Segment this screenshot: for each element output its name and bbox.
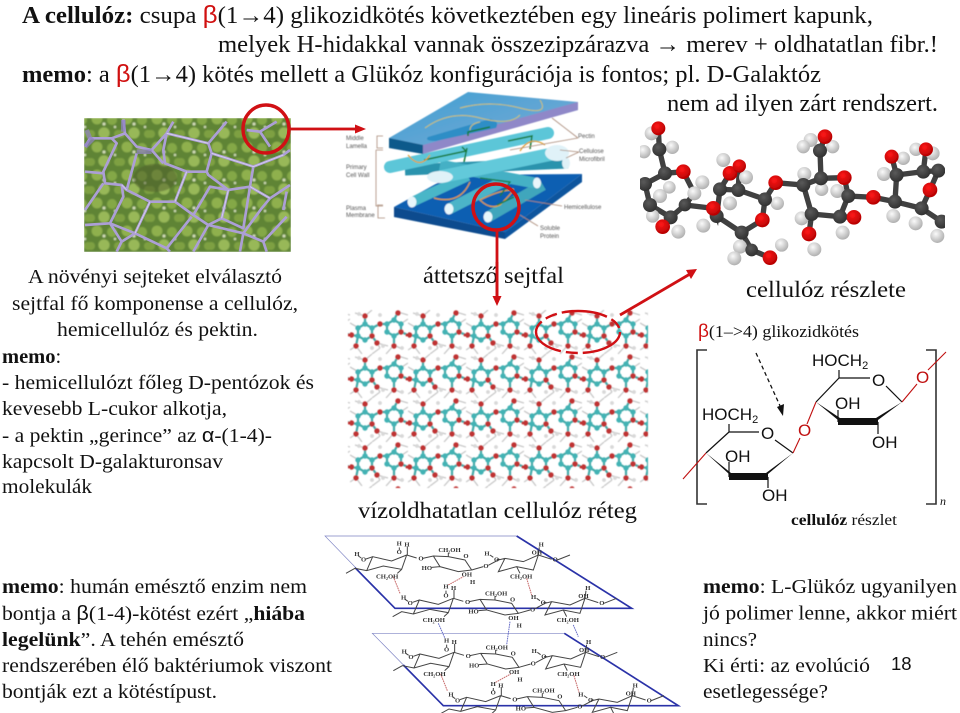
chain 4 bbox=[440, 681, 664, 713]
text: human digestion memo: legelünk”. A tehén emésztő bbox=[2, 629, 244, 651]
text: L-glucose memo: jó polimer lenne, akkor miért bbox=[702, 602, 957, 624]
labels: Hemicellulose bbox=[564, 205, 602, 211]
chain 2: O bbox=[530, 606, 535, 613]
labels: Pectin bbox=[578, 134, 595, 140]
chain 1: O bbox=[553, 557, 558, 564]
chain 2: OH bbox=[578, 593, 589, 600]
chain 3: HO bbox=[469, 662, 479, 669]
text: human digestion memo: bontja a β(1-4)-kötést ezért „ hiába bbox=[2, 602, 305, 625]
chain 1: O bbox=[483, 563, 489, 570]
chain 3: CH₂OH bbox=[486, 644, 509, 651]
chain 2: H bbox=[531, 594, 537, 601]
labels bbox=[346, 134, 605, 240]
arrow: lattice to structural formula bbox=[620, 269, 697, 315]
chain 3: O bbox=[444, 646, 449, 653]
ring 2: 2 bbox=[862, 360, 868, 372]
chain 1: O bbox=[463, 553, 469, 560]
chain 3: H bbox=[452, 639, 458, 646]
chain 1: H bbox=[539, 542, 545, 549]
chain 2: HO bbox=[468, 608, 479, 615]
brackets and leader lines bbox=[376, 118, 579, 226]
arrow: micrograph to cell wall diagram bbox=[289, 124, 366, 134]
labels: Plasma bbox=[346, 206, 367, 212]
chain 2: H bbox=[585, 585, 591, 592]
chain 1: HO bbox=[422, 565, 432, 572]
chain 1: OH bbox=[532, 550, 543, 557]
chain 1: O bbox=[494, 556, 499, 563]
text: plant cell wall notes: hemicellulóz és pektin. bbox=[57, 319, 258, 341]
micrograph: plant cells bbox=[84, 118, 291, 252]
chain 2: OH bbox=[508, 615, 519, 622]
labels: Primary bbox=[346, 165, 367, 171]
chain 1: CH₂OH bbox=[510, 574, 533, 581]
text: plant cell wall notes: memo: bbox=[2, 346, 61, 368]
title: cellulóz summary bbox=[22, 1, 938, 117]
text: human digestion memo: rendszerében élő baktériumok viszont bbox=[2, 655, 332, 677]
chain 4: O bbox=[491, 690, 496, 697]
ring 1: HOCH bbox=[702, 405, 752, 424]
title: cellulóz summary: memo: a β(1→4) kötés mellett a Glükóz konfigurációja is fontos; pl. D-Galaktóz bbox=[22, 60, 821, 88]
chain 2: CH₂OH bbox=[557, 617, 580, 624]
ring 1: O bbox=[761, 424, 774, 443]
chain 1: H bbox=[484, 551, 490, 558]
chain 2: O bbox=[443, 592, 449, 599]
ring 1: OH bbox=[762, 486, 788, 505]
arrow: dashed pointer to bond bbox=[756, 353, 784, 416]
chain 4: H bbox=[498, 682, 504, 689]
text: plant cell wall notes: sejtfal fő komponense a cellulóz, bbox=[12, 293, 298, 315]
text: human digestion memo: memo: humán emésztő enzim nem bbox=[2, 576, 307, 598]
chain 1 bbox=[346, 540, 570, 586]
chain 4: H bbox=[633, 682, 639, 689]
ring 2 bbox=[812, 351, 902, 452]
text: L-glucose memo: Ki érti: az evolúció bbox=[703, 655, 870, 677]
chain 3: O bbox=[511, 650, 516, 657]
chain 1: O bbox=[397, 549, 402, 556]
text: L-glucose memo bbox=[702, 576, 957, 703]
ring 1: 2 bbox=[752, 414, 758, 426]
chain 3: CH₂OH bbox=[557, 671, 580, 678]
chain 3: OH bbox=[579, 647, 590, 654]
labels: Cell Wall bbox=[346, 173, 369, 179]
chain 1: H bbox=[470, 579, 476, 586]
chain 1: H bbox=[397, 540, 403, 547]
ring 2: OH bbox=[872, 433, 898, 452]
red arrow over heading bbox=[496, 262, 498, 298]
ring 1: OH bbox=[725, 447, 750, 466]
upper sheet bbox=[325, 536, 632, 608]
text: plant cell wall notes: - hemicellulózt főleg D-pentózok és bbox=[2, 372, 314, 394]
text: L-glucose memo: memo: L-Glükóz ugyanilyen bbox=[703, 576, 957, 598]
upper middle lamella slab bbox=[389, 92, 578, 154]
labels: Protein bbox=[540, 234, 559, 240]
title: cellulóz summary: nem ad ilyen zárt rendszert. bbox=[667, 91, 938, 117]
chain 2: O bbox=[510, 596, 515, 603]
chain 4: H bbox=[448, 692, 454, 699]
labels: Soluble bbox=[540, 226, 561, 232]
labels: Membrane bbox=[346, 213, 375, 219]
chain 3: H bbox=[444, 638, 450, 645]
text: plant cell wall notes: kapcsolt D-galakturonsav bbox=[2, 451, 224, 473]
chain 1: O bbox=[418, 556, 424, 563]
callout: dashed ellipse on lattice bbox=[536, 311, 620, 353]
ring 1 bbox=[702, 405, 793, 505]
chain 1: H bbox=[404, 542, 410, 549]
text: plant cell wall notes: kevesebb L-cukor alkotja, bbox=[2, 398, 227, 420]
chain 4: O bbox=[577, 704, 582, 711]
middle cellulose microfibrils bbox=[390, 133, 570, 207]
lower sheet bbox=[372, 633, 678, 706]
text: L-glucose memo: nincs? bbox=[703, 629, 757, 651]
chain 3: O bbox=[408, 654, 414, 661]
chain 2 bbox=[393, 584, 617, 629]
chain 3: H bbox=[586, 639, 592, 646]
chart: structural formula of cellulose bbox=[683, 321, 946, 529]
chain 1: O bbox=[361, 557, 366, 564]
chain 3: H bbox=[402, 648, 408, 655]
arrow: cell wall down to cellulose layer bbox=[492, 230, 502, 306]
chain 2: O bbox=[408, 600, 413, 607]
caption: cellulose detail: cellulóz részlet bbox=[791, 512, 898, 529]
chain 2: CH₂OH bbox=[485, 590, 508, 597]
chain 2: O bbox=[465, 599, 470, 606]
chain 3: O bbox=[541, 654, 546, 661]
chain 4: CH₂OH bbox=[532, 688, 555, 695]
chain 3: OH bbox=[509, 669, 520, 676]
chain 3: H bbox=[532, 648, 538, 655]
chain 4: H bbox=[578, 691, 584, 698]
chain 3: O bbox=[531, 660, 536, 667]
chain 2: CH₂OH bbox=[423, 617, 446, 624]
text: plant cell wall notes: A növényi sejteket elválasztó bbox=[28, 266, 282, 288]
labels: Microfibril bbox=[579, 157, 605, 163]
hydrogen bonds bbox=[393, 577, 579, 692]
glycosidic linkage in red bbox=[683, 352, 946, 479]
chain 3: H bbox=[517, 676, 523, 683]
label: glycosidic bond: β(1–>4) glikozidkötés bbox=[698, 321, 859, 341]
chain 2: H bbox=[443, 584, 449, 591]
chain 4: HO bbox=[516, 706, 526, 713]
chain 4: OH bbox=[626, 690, 637, 697]
text: plant cell wall notes: molekulák bbox=[2, 476, 93, 498]
chain 2: H bbox=[451, 585, 457, 592]
chain 4: O bbox=[557, 694, 562, 701]
title: cellulóz summary: A cellulóz: csupa β(1→4) glikozidkötés következtében egy lineáris polimert kapunk, bbox=[22, 1, 873, 29]
subscript n: n bbox=[940, 494, 946, 508]
heading: translucent cell wall: áttetsző sejtfal bbox=[423, 263, 564, 288]
lower cellulose microfibrils bbox=[408, 176, 543, 222]
chain 4: O bbox=[512, 696, 518, 703]
chain 4: O bbox=[455, 697, 460, 704]
chart: cellulose lattice bbox=[348, 310, 648, 488]
chain 3 bbox=[393, 638, 617, 683]
chain 1: CH₂OH bbox=[438, 547, 461, 554]
ring 2: O bbox=[872, 371, 885, 390]
chain 1: H bbox=[354, 551, 360, 558]
lower plasma membrane slab bbox=[394, 174, 582, 239]
text: plant cell wall notes bbox=[2, 266, 314, 498]
text: human digestion memo bbox=[2, 576, 332, 703]
text: L-glucose memo: esetlegessége? bbox=[703, 681, 828, 703]
chain 3: CH₂OH bbox=[423, 671, 446, 678]
chain 4: H bbox=[491, 681, 497, 688]
diagram: hydrogen-bonded cellulose sheets bbox=[325, 536, 678, 713]
glycosidic linkage in red: O bbox=[798, 421, 811, 440]
text: plant cell wall notes: - a pektin „gerince” az α-(1-4)- bbox=[2, 424, 272, 447]
chain 1: CH₂OH bbox=[376, 574, 399, 581]
ring 2: HOCH bbox=[812, 351, 862, 370]
caption: water-insoluble cellulose layer: vízoldhatatlan cellulóz réteg bbox=[358, 498, 638, 523]
molecule: ball and stick cellulose bbox=[637, 121, 949, 265]
chain 4: O bbox=[588, 697, 593, 704]
labels: Cellulose bbox=[579, 149, 604, 155]
labels: Lamella bbox=[346, 144, 368, 150]
page number: 18 bbox=[891, 653, 912, 674]
ring 2: OH bbox=[835, 394, 860, 413]
chain 3: O bbox=[466, 653, 471, 660]
text: human digestion memo: bontják ezt a kötéstípust. bbox=[2, 681, 217, 703]
brackets bbox=[697, 350, 936, 504]
chain 2: H bbox=[401, 594, 407, 601]
chain 2: O bbox=[541, 600, 546, 607]
chain 3: O bbox=[600, 654, 605, 661]
title: cellulóz summary: melyek H-hidakkal vannak összezipzárazva → merev + oldhatatlan fibr.! bbox=[218, 31, 938, 58]
chain 2: H bbox=[517, 622, 523, 629]
diagram: plant cell wall bbox=[346, 92, 605, 240]
callout: circle on micrograph bbox=[243, 105, 289, 153]
labels: Middle bbox=[346, 136, 364, 142]
chain 4: O bbox=[647, 697, 652, 704]
chain 2: O bbox=[599, 600, 604, 607]
glycosidic linkage in red: O bbox=[916, 368, 929, 387]
chain 1: OH bbox=[462, 572, 473, 579]
callout: circle on cell wall bbox=[473, 184, 519, 230]
dark patch in the micrograph bbox=[133, 164, 177, 192]
heading: cellulose detail: cellulóz részlete bbox=[746, 277, 906, 302]
